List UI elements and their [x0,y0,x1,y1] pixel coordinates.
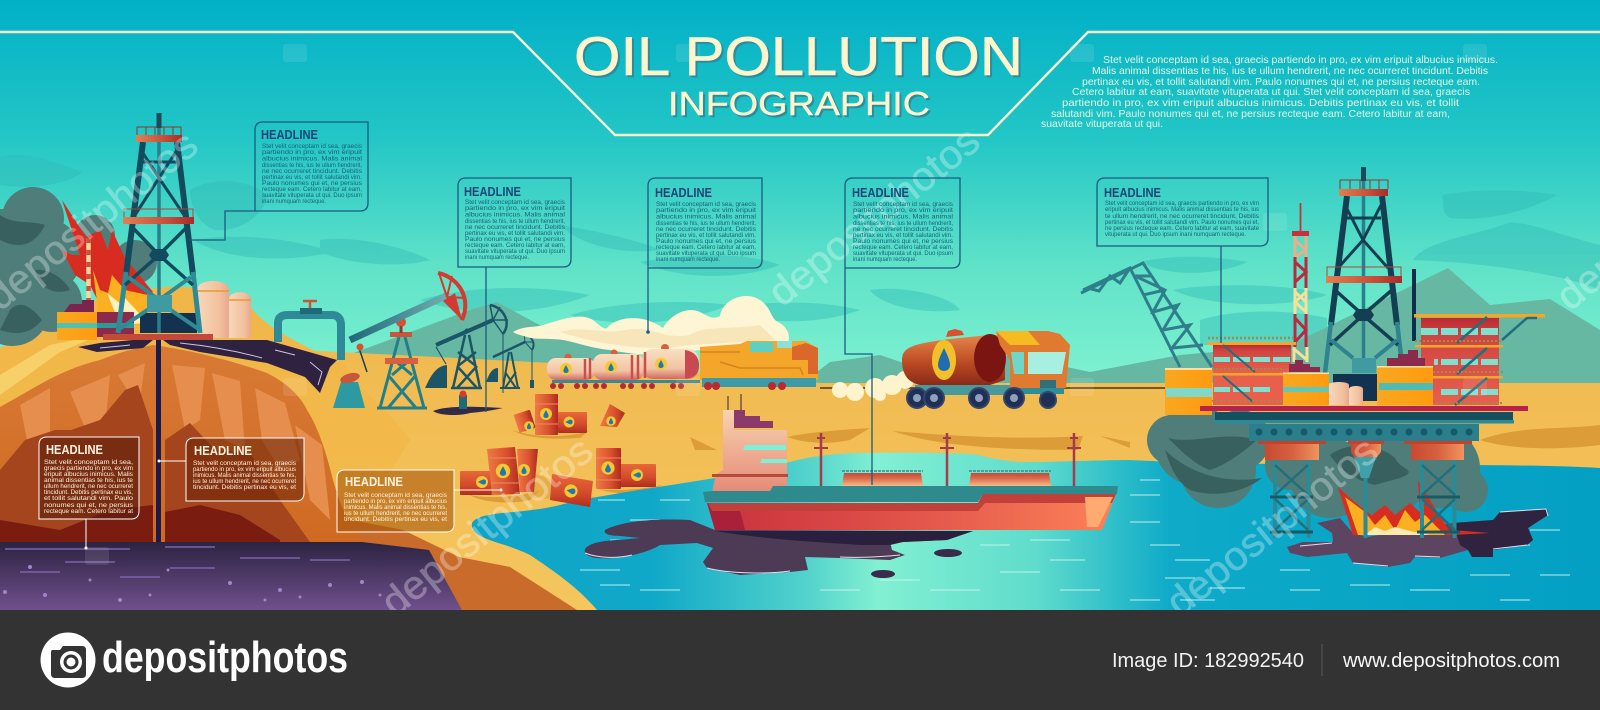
superstructure [712,410,787,492]
red and white lattice tower [1292,203,1309,362]
intro paragraph: Cetero labitur at eam, suavitate vituperata ut qui. Stet velit conceptam id sea, graecis [1072,87,1470,98]
callout B: ius te ullum hendrerit, ne nec ocurreret [193,479,296,485]
callout C: HEADLINE [345,475,403,489]
dark block under derrick [1333,374,1378,401]
callout 4 [845,178,960,485]
callout 5: pertinax eu vis, et tollit salutandi vim. Paulo nonumes qui et, [1105,220,1259,226]
callout 1: pertinax eu vis, et tollit salutandi vim. [262,175,362,181]
smoke left [0,187,157,346]
callout 4: ne nec ocurreret tincidunt. Debitis [853,227,953,233]
callout 5: HEADLINE [1104,186,1161,200]
derrick base [103,334,213,340]
website url: www.depositphotos.com [1342,650,1560,672]
callout 2: Paulo nonumes qui et, ne persius [465,237,565,243]
callout 3: inani numquam recteque. [656,257,720,263]
callout 1: dissentias te his, ius te ullum hendrerit, [262,163,362,169]
callout 3: recteque eam. Cetero labitur at eam, [656,245,756,251]
stalactites [20,363,330,520]
intro paragraph [1041,55,1498,130]
callout A: Stet velit conceptam id sea, [44,460,133,466]
callout A: recteque eam. Cetero labitur at [44,509,133,515]
water ripples [580,480,1570,600]
callout B: inimicus. Malis animal dissentias te his, [193,473,296,479]
callout A: HEADLINE [46,443,103,457]
vent pipe [1412,269,1416,341]
callout 2: Stet velit conceptam id sea, graecis [465,200,565,206]
watermark: depositphotos [1158,428,1386,625]
callout 2: HEADLINE [464,185,521,199]
oil slick ship [585,519,973,578]
callout B [158,438,304,501]
callout 1: HEADLINE [261,128,318,142]
intro paragraph: Stet velit conceptam id sea, graecis partiendo in pro, ex vim eripuit albucius inimicus. [1103,55,1498,66]
locomotive [700,341,818,390]
callout C [337,470,502,532]
flames left [62,200,157,325]
callout C: partiendo in pro, ex vim eripuit albucius [344,499,447,505]
callout A: graecis partiendo in pro, ex vim [44,466,133,472]
callout 4: Stet velit conceptam id sea, graecis [853,202,953,208]
orange modules [1165,350,1433,415]
callout 4: Paulo nonumes qui et, ne persius [853,239,953,245]
oil spill on hill [78,340,337,393]
callout 3: pertinax eu vis, et tollit salutandi vim. [656,233,756,239]
callout 3 [646,178,762,334]
callout 5: Stet velit conceptam id sea, graecis partiendo in pro, ex vim [1105,201,1259,207]
masts [814,433,1081,486]
water [472,453,1600,610]
callout 3: Paulo nonumes qui et, ne persius [656,239,756,245]
callout 5: eripuit albucius inimicus. Malis animal dissentias te his, ius [1105,207,1259,213]
callout 3: partiendo in pro, ex vim eripuit [656,208,756,214]
derrick left [118,113,200,333]
intro paragraph: Malis animal dissentias te his, ius te ullum hendrerit, ne nec ocurreret tincidunt. Debitis [1092,66,1488,77]
intro paragraph: partiendo in pro, ex vim eripuit albucius inimicus. Debitis pertinax eu vis, et tollit [1062,98,1459,109]
callout 2: albucius inimicus. Malis animal [465,212,565,218]
callout B: HEADLINE [194,444,252,458]
steam cloud [513,296,789,354]
callout 5: vituperata ut qui. Duo ipsum inani numquam recteque. [1105,232,1246,238]
callout C: tincidunt. Debitis pertinax eu vis, et [344,517,447,523]
callout 2: recteque eam. Cetero labitur at eam, [465,243,565,249]
cliff cross-section [0,345,367,542]
deck houses [842,473,1051,486]
callout 3: HEADLINE [655,186,712,200]
deep rock [0,505,153,542]
sky clouds [0,155,1600,345]
callout 2: suavitate vituperata ut qui. Duo ipsum [465,249,565,255]
derrick right [1325,167,1403,373]
callout 1: suavitate vituperata ut qui. Duo ipsum [262,193,362,199]
rig lower deck [1214,412,1514,424]
callout 4: albucius inimicus. Malis animal [853,214,953,220]
callout B: tincidunt. Debitis pertinax eu vis, et [193,485,296,491]
callout 3: dissentias te his, ius te ullum hendrerit, [656,221,756,227]
callout 4: dissentias te his, ius te ullum hendrerit, [853,221,953,227]
callout 2 [458,178,571,412]
callout C: ius te ullum hendrerit, ne nec ocurreret [344,511,447,517]
callout 5 [1097,178,1268,343]
well pipe [156,340,161,542]
storage tanks [197,281,251,338]
watermark: depositphotos [373,428,601,625]
hull [707,494,1116,530]
horizon track [820,387,1170,389]
pumpjack small [486,333,534,388]
callout 4: inani numquam recteque. [853,257,917,263]
callout B: Stet velit conceptam id sea, graecis [193,461,296,467]
callout 1 [189,122,368,240]
callout 1: Paulo nonumes qui et, ne persius [262,181,362,187]
crane [1081,263,1212,367]
callout 4: HEADLINE [852,186,909,200]
callout 2: pertinax eu vis, et tollit salutandi vim. [465,231,565,237]
oil reservoir [0,542,462,610]
smoke behind rig [1147,405,1488,518]
red accommodation left [1207,338,1296,405]
footer bar [0,610,1600,710]
subtitle: INFOGRAPHIC [668,86,930,123]
callout 3: ne nec ocurreret tincidunt. Debitis [656,227,756,233]
callout 4: recteque eam. Cetero labitur at eam, [853,245,953,251]
intro paragraph: suavitate vituperata ut qui. [1041,119,1163,130]
watermark: depositphotos [760,118,988,315]
callout 5: ne persius recteque eam. Cetero labitur at eam, suavitate [1105,226,1260,232]
truck dust [832,371,914,401]
rig columns [1258,441,1472,460]
callout A: tincidunt. Debitis pertinax eu vis, [44,490,133,496]
barrels back group [514,394,625,435]
sky background [0,0,1600,390]
callout C: Stet velit conceptam id sea, graecis [344,493,447,499]
tanker truck [902,329,1070,408]
callout 2: inani numquam recteque. [465,255,529,261]
flare stack left [64,238,94,312]
small rig tanks [1329,382,1363,405]
logo wordmark: depositphotos [102,633,348,682]
callout A [39,437,139,550]
callout 1: albucius inimicus. Malis animal [262,156,362,162]
sand hill [0,287,410,545]
callout A: animal dissentias te his, ius te [44,478,134,484]
title: OIL POLLUTION [574,25,1023,87]
callout 4: suavitate vituperata ut qui. Duo ipsum [853,251,953,257]
icon: camera logo [40,632,96,688]
callout 3: albucius inimicus. Malis animal [656,214,756,220]
oil slick right [1287,509,1548,567]
pipeline arch [278,301,341,360]
header frame [0,32,1600,135]
callout 2: partiendo in pro, ex vim eripuit [465,206,565,212]
callout A: et tollit salutandi vim. Paulo [44,496,134,502]
callout 4: pertinax eu vis, et tollit salutandi vim. [853,233,953,239]
tanker ship [703,394,1118,530]
callout 3: Stet velit conceptam id sea, graecis [656,202,756,208]
mountains [340,268,1600,392]
brown shore layer [337,517,577,610]
rig main deck [1200,406,1528,411]
sand plain [300,350,1600,610]
callout A: ullum hendrerit, ne nec ocurreret [44,484,133,490]
pumpjack large [333,273,466,408]
callout 1: partiendo in pro, ex vim eripuit [262,150,362,156]
callout 1: ne nec ocurreret tincidunt. Debitis [262,169,362,175]
pumpjack medium [425,305,508,393]
red accommodation right [1414,314,1545,405]
callout 5: te ullum hendrerit, ne nec ocurreret tincidunt. Debitis [1105,214,1259,220]
building left [57,312,197,340]
callout 1: inani numquam recteque. [262,199,326,205]
rig fire [1338,480,1490,535]
intro paragraph: salutandi vim. Paulo nonumes qui et, ne persius recteque eam. Cetero labitur at eam, [1051,109,1450,120]
image id: Image ID: 182992540 [1112,650,1304,672]
callout A: eripuit albucius inimicus. Malis [44,472,133,478]
callout 3: suavitate vituperata ut qui. Duo ipsum [656,251,756,257]
oil spill by pump [433,390,503,415]
rig beam [1249,424,1479,441]
callout 2: ne nec ocurreret tincidunt. Debitis [465,225,565,231]
train tank cars [547,344,700,389]
intro paragraph: pertinax eu vis, et tollit salutandi vim. Paulo nonumes qui et, ne persius recteque eam. [1082,77,1480,88]
sand shading [470,425,1600,502]
callout A: nonumes qui et, ne persius [44,503,133,509]
callout 1: recteque eam. Cetero labitur at eam, [262,187,362,193]
callout C: inimicus. Malis animal dissentias te his, [344,505,447,511]
callout 1: Stet velit conceptam id sea, graecis [262,144,362,150]
rig legs [1270,457,1460,538]
callout 4: partiendo in pro, ex vim eripuit [853,208,953,214]
callout 2: dissentias te his, ius te ullum hendrerit, [465,219,565,225]
callout B: partiendo in pro, ex vim eripuit albucius [193,467,296,473]
barrels front group [460,447,656,507]
inner rock [0,385,153,542]
